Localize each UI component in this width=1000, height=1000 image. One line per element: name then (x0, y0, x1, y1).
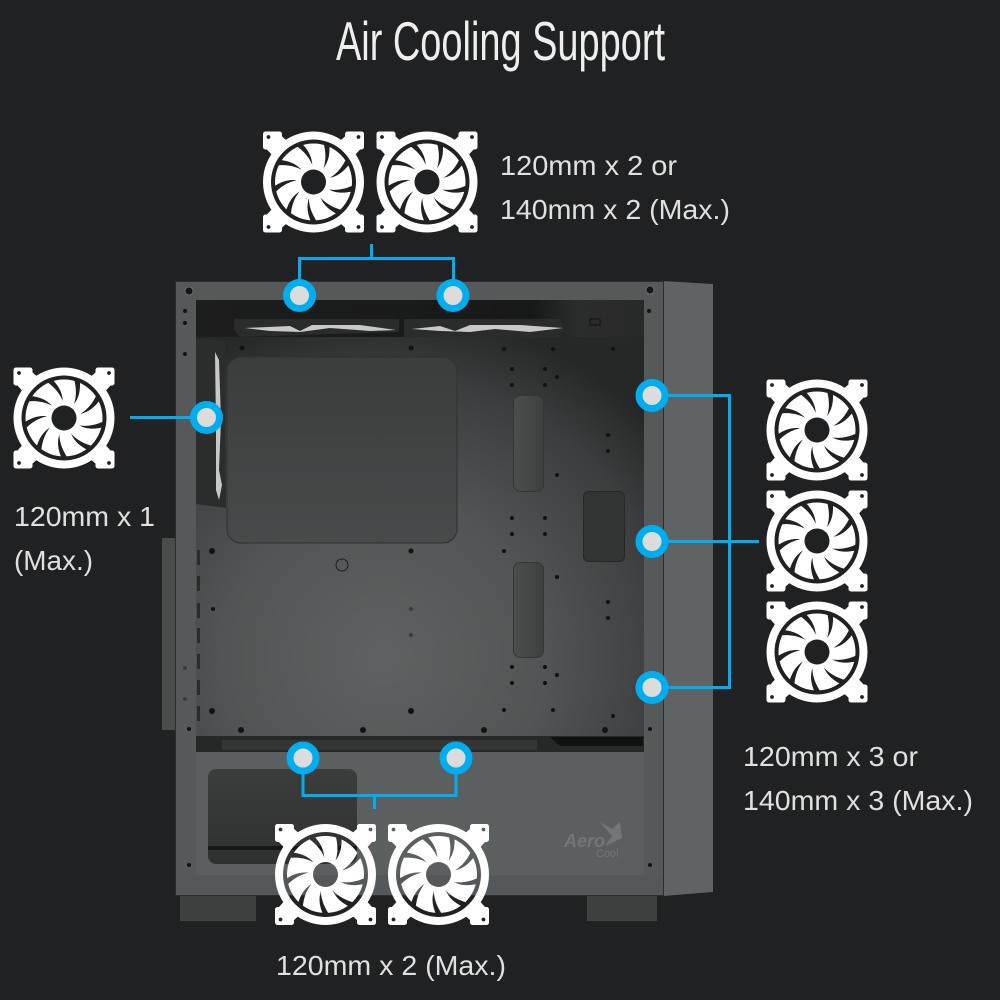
logo (563, 822, 622, 860)
marker (639, 528, 665, 554)
icon: top fan 2 (376, 131, 478, 233)
logo: Cool (596, 848, 619, 860)
label: top fans: 120mm x 2 or (500, 150, 677, 181)
icon: right fan 1 (766, 379, 868, 481)
icon: left fan (13, 367, 115, 469)
left connector (130, 404, 220, 430)
case frame (175, 281, 664, 896)
label: top fans (500, 150, 730, 225)
screw holes (183, 309, 652, 867)
corner screws (185, 286, 654, 890)
icon: right fan 3 (766, 601, 868, 703)
icon: bottom fan 1 (274, 824, 376, 926)
marker (286, 282, 312, 308)
lower vent band (196, 736, 644, 752)
icon: bottom fan 2 (388, 824, 490, 926)
label: left fan: 120mm x 1 (14, 501, 155, 532)
label: left fan (14, 501, 155, 576)
interior back plate (196, 300, 644, 736)
title: Air Cooling Support (336, 10, 665, 72)
top connector (286, 244, 466, 308)
cable slots (514, 396, 544, 658)
label: top fans: 140mm x 2 (Max.) (500, 194, 730, 225)
bottom frame rail (175, 876, 664, 896)
label: right fans: 140mm x 3 (Max.) (743, 785, 973, 816)
label: bottom fans: 120mm x 2 (Max.) (276, 950, 506, 981)
case feet (180, 893, 657, 921)
frame edges (176, 282, 664, 896)
marker (290, 745, 316, 771)
PSU shroud (196, 752, 644, 875)
marker (194, 404, 220, 430)
marker (443, 745, 469, 771)
marker (639, 674, 665, 700)
icon: top fan 1 (262, 131, 364, 233)
bottom connector (290, 745, 469, 809)
left fan (196, 338, 226, 508)
rear cutout (584, 492, 624, 562)
motherboard cutout (227, 357, 457, 543)
top fan bay (196, 300, 644, 337)
label: right fans (743, 741, 973, 816)
right side panel (663, 281, 713, 896)
icon: right fan 2 (766, 490, 868, 592)
PSU opening (208, 769, 357, 864)
marker (440, 282, 466, 308)
label: left fan: (Max.) (14, 545, 93, 576)
rear side bracket (162, 538, 176, 730)
PC case (162, 281, 713, 921)
label: right fans: 120mm x 3 or (743, 741, 918, 772)
logo: Aero (563, 831, 605, 851)
marker (639, 382, 665, 408)
right connector (639, 382, 759, 700)
